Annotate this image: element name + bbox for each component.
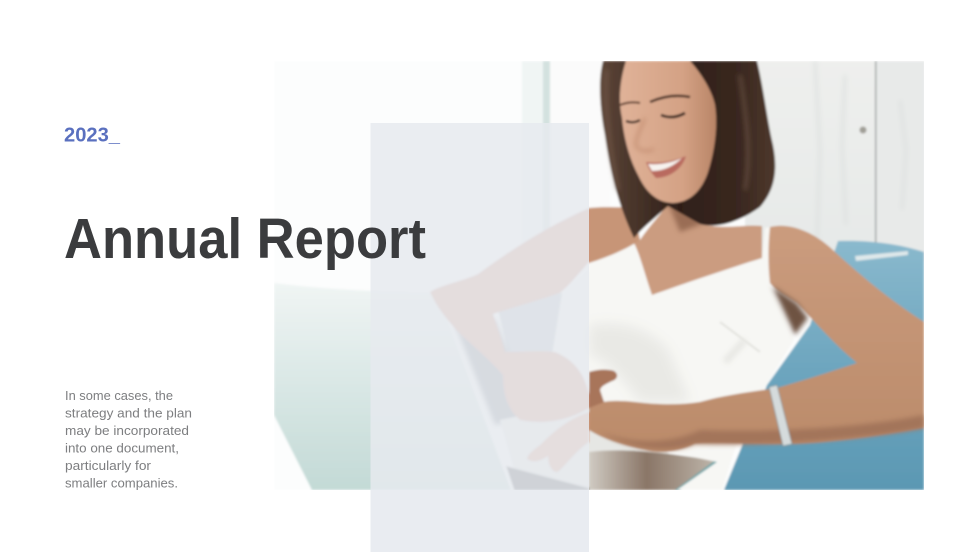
- dark hair: [600, 61, 775, 238]
- white dress: [589, 226, 794, 490]
- smiling mouth: [646, 156, 686, 178]
- hair highlights: [606, 70, 748, 190]
- face: [620, 61, 716, 203]
- description text block: strategy and the plan: [65, 406, 192, 420]
- eyebrows and eyes: [620, 96, 690, 122]
- arm outside the panel: [589, 207, 640, 263]
- year label: 2023_: [64, 124, 121, 146]
- blue armchair: [724, 241, 924, 490]
- description text block: In some cases, the: [65, 389, 173, 403]
- photo: smiling woman working on a laptop: [274, 61, 925, 491]
- nose shadow: [636, 118, 654, 151]
- description text block: particularly for: [65, 459, 151, 473]
- laptop keyboard base: [502, 408, 718, 490]
- translucent pale panel: [370, 123, 589, 552]
- description text block: may be incorporated: [65, 424, 189, 438]
- shoulder and right arm: [589, 226, 924, 452]
- description text block: [65, 389, 192, 490]
- raised fingers: [589, 370, 617, 408]
- neck and chest: [633, 204, 764, 296]
- title: Annual Report: [64, 207, 426, 271]
- dress shadows: [589, 322, 760, 402]
- panel extension below photo: [370, 490, 589, 552]
- foreground laptop lid: [274, 283, 511, 490]
- cushion and dark shadow beside the elbow: [459, 294, 560, 424]
- description text block: smaller companies.: [65, 476, 178, 490]
- neck shadow under hair: [668, 206, 702, 233]
- description text block: into one document,: [65, 442, 179, 456]
- left arm behind the panel: [430, 208, 589, 422]
- silver bracelet: [769, 385, 792, 446]
- second hand on the keyboard: [527, 412, 589, 472]
- arm underside shadow: [600, 415, 924, 449]
- room background: [522, 61, 924, 490]
- armpit shadow: [772, 286, 808, 335]
